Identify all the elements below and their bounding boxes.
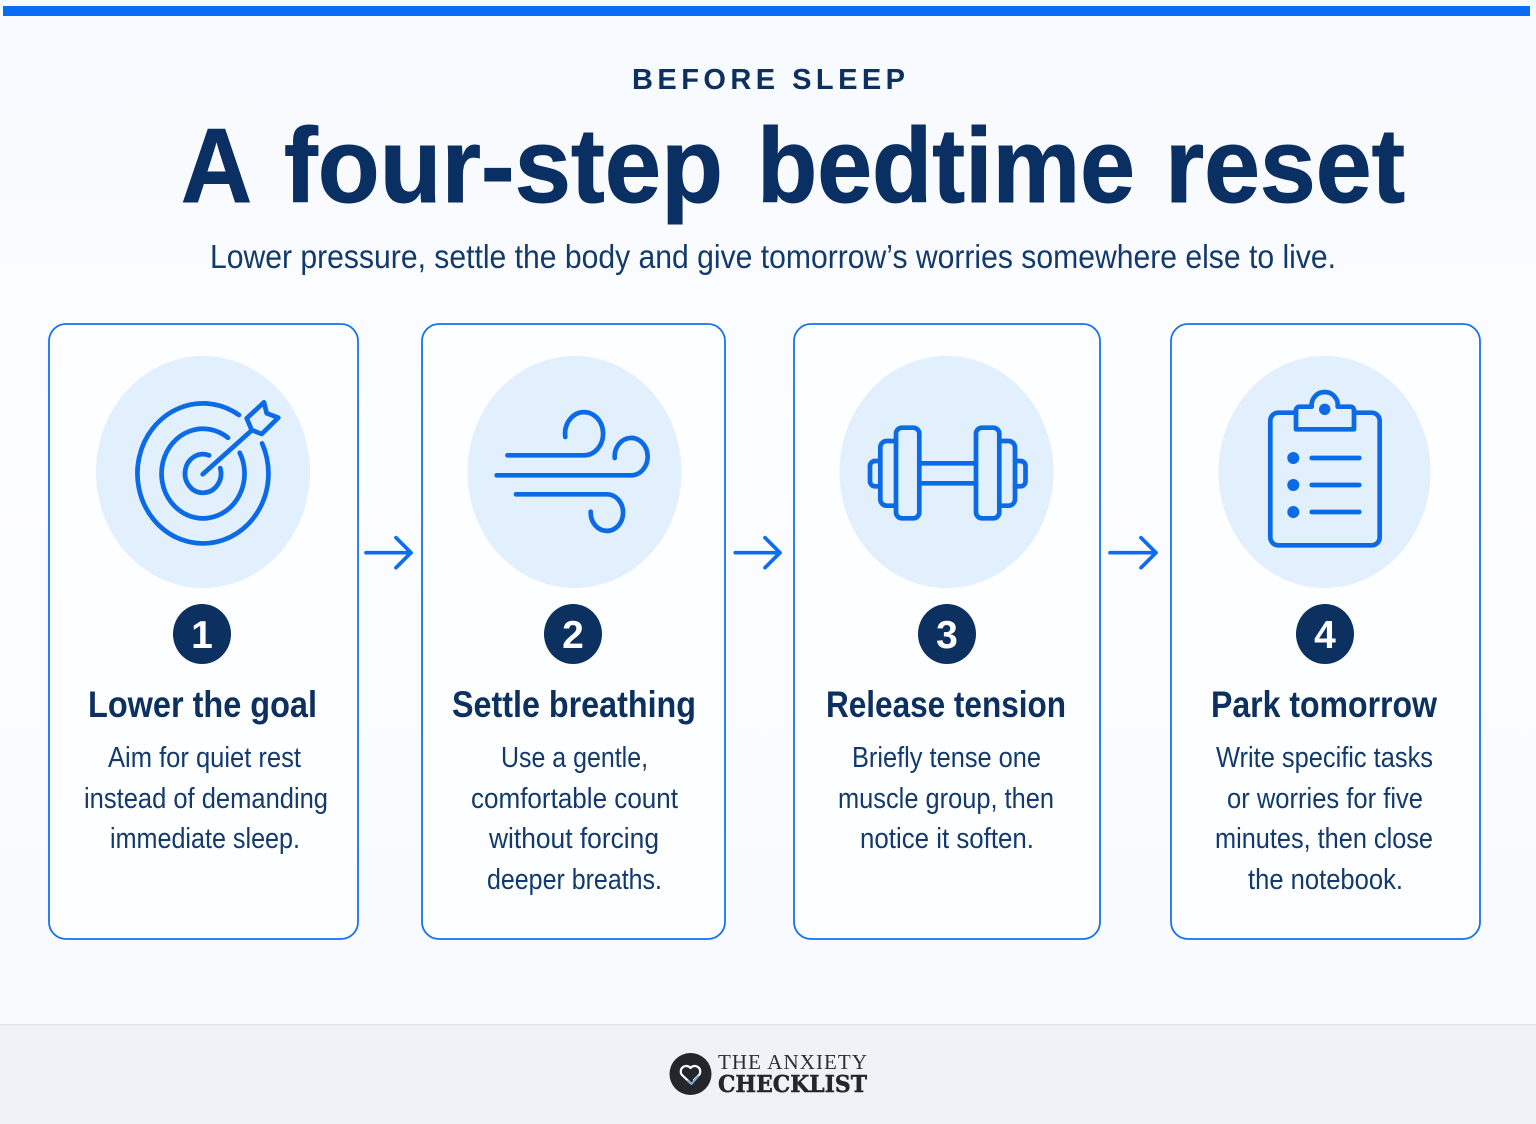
step number 2 [544, 604, 602, 664]
arrow: step 1 to 2 [366, 538, 411, 568]
title: A [181, 107, 252, 225]
panel: step 4 [1171, 324, 1480, 939]
text: step 4 description: minutes, then close [1215, 823, 1433, 855]
step number 3 [918, 604, 976, 664]
arrow: step 2 to 3 [735, 538, 780, 568]
text: step 2 description: comfortable count [471, 783, 678, 815]
eyebrow: BEFORE SLEEP [632, 64, 905, 96]
text: step 4 description: or worries for five [1227, 783, 1423, 815]
icon: wind [468, 356, 682, 588]
text: step 3 description [838, 742, 1054, 855]
title: bedtime [757, 107, 1135, 225]
arrow: step 3 to 4 [1110, 538, 1156, 568]
panel: step 3 [794, 324, 1100, 939]
step number 2: 2 [562, 614, 584, 657]
text: step 2 description [471, 742, 678, 896]
text: step 1 description: immediate sleep. [110, 823, 300, 855]
panel: step 2 [422, 324, 725, 939]
text: step 2 description: without forcing [488, 823, 659, 855]
step number 3: 3 [936, 614, 958, 657]
text: step 3 description: notice it soften. [860, 823, 1034, 855]
step number 1: 1 [191, 614, 213, 657]
text: step 3 description: muscle group, then [838, 783, 1054, 815]
text: step 4 description: Write specific tasks [1216, 742, 1433, 774]
top accent bar [3, 6, 1530, 16]
title: four-step [284, 107, 723, 225]
title [181, 107, 1405, 225]
heading: settle breathing: Settle breathing [452, 684, 696, 725]
heading: release tension: Release tension [826, 684, 1066, 725]
footer band [0, 1024, 1536, 1124]
text: step 3 description: Briefly tense one [852, 742, 1041, 774]
step number 4: 4 [1314, 614, 1336, 657]
heading: park tomorrow: Park tomorrow [1211, 684, 1437, 725]
heading: lower the goal: Lower the goal [88, 684, 317, 725]
text: step 1 description: instead of demanding [84, 783, 328, 815]
icon: dumbbell [840, 356, 1054, 588]
text: step 2 description: Use a gentle, [501, 742, 648, 774]
text: step 2 description: deeper breaths. [487, 864, 662, 896]
text: step 4 description: the notebook. [1248, 864, 1403, 896]
panel: step 1 [49, 324, 358, 939]
text: step 4 description [1215, 742, 1433, 896]
step number 4 [1296, 604, 1354, 664]
subtitle: Lower pressure, settle the body and give tomorrow’s worries somewhere else to live. [210, 238, 1336, 275]
icon: clipboard [1218, 356, 1430, 588]
text: step 1 description [84, 742, 328, 855]
logo: the anxiety checklist [670, 1050, 867, 1098]
icon: target with arrow [96, 356, 310, 588]
step number 1 [173, 604, 231, 664]
title: reset [1165, 107, 1405, 225]
text: step 1 description: Aim for quiet rest [108, 742, 301, 774]
logo: the anxiety checklist: THE ANXIETY [718, 1050, 867, 1074]
logo: the anxiety checklist: CHECKLIST [718, 1071, 867, 1098]
